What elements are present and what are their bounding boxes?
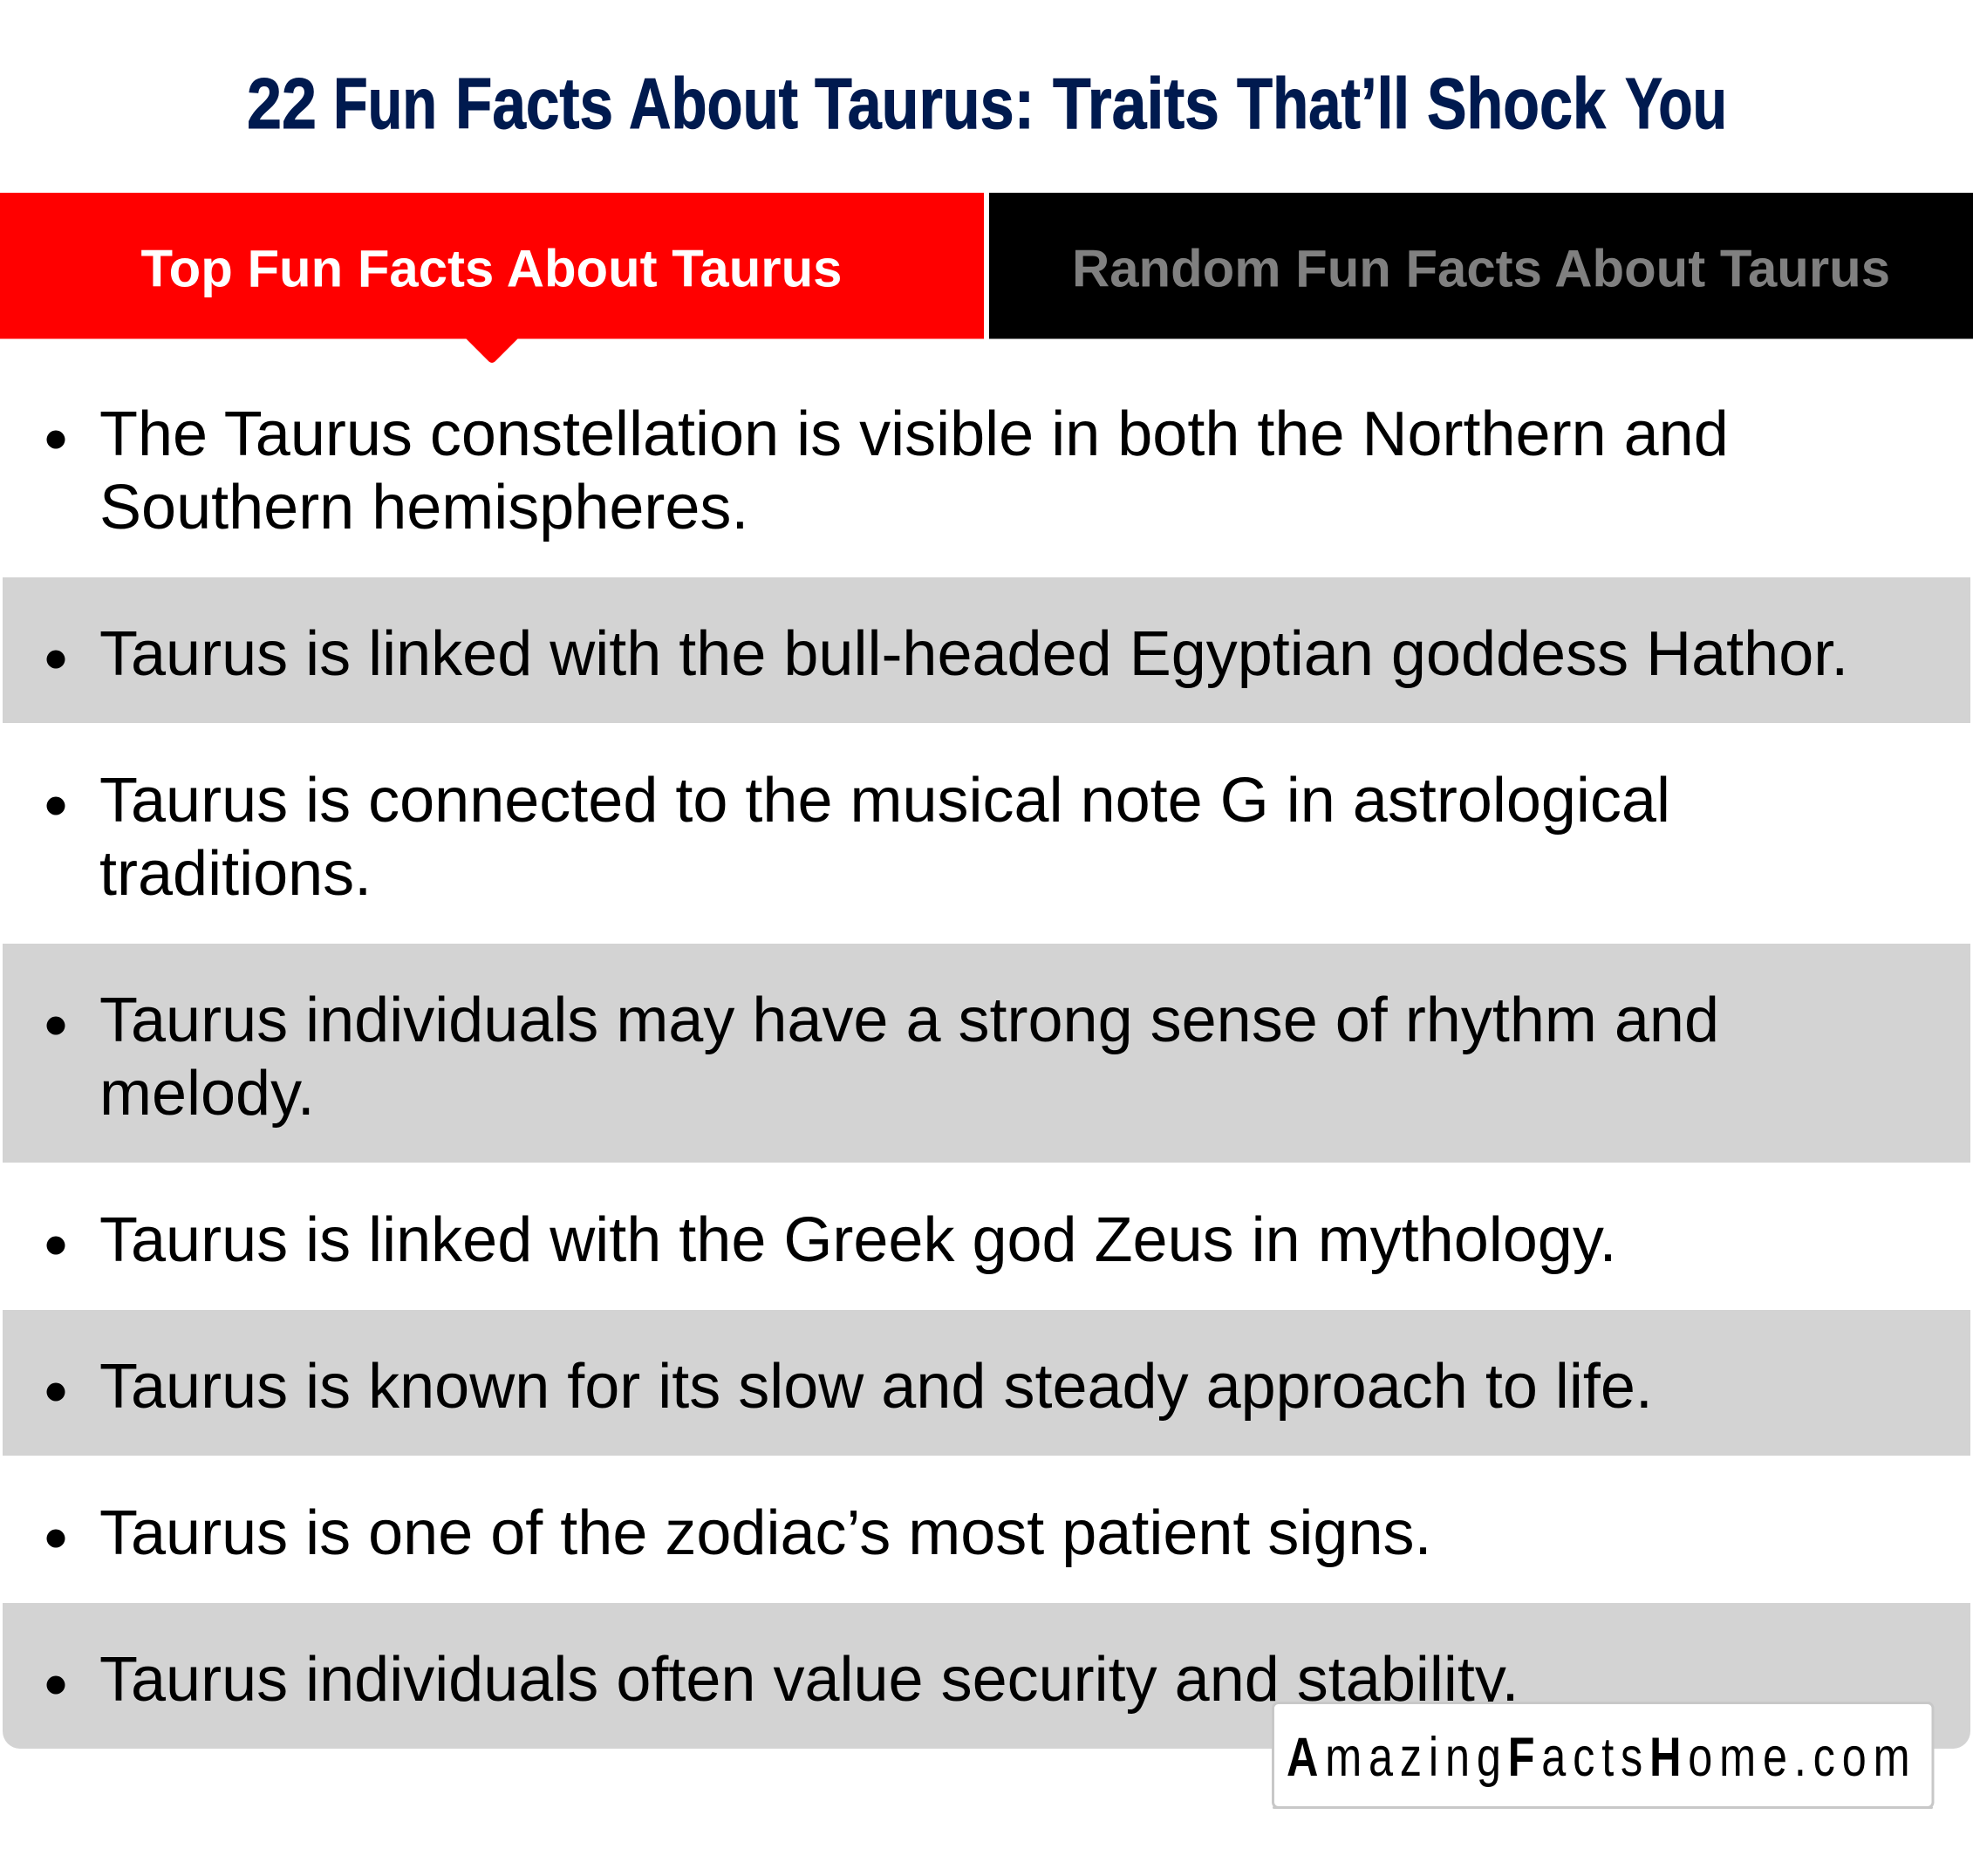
fact 3: Taurus is connected to the musical note G in astrological	[99, 766, 1670, 836]
title: You	[1625, 63, 1727, 144]
title: Traits	[1053, 63, 1219, 144]
title: Facts	[455, 63, 613, 144]
fact 1: Southern hemispheres.	[99, 473, 748, 542]
fact 7: Taurus is one of the zodiac’s most patient signs.	[99, 1498, 1432, 1568]
fact 8	[3, 1603, 1970, 1749]
tab: random fun facts	[989, 193, 1973, 338]
fact 6	[3, 1310, 1970, 1456]
fact 4: melody.	[99, 1059, 315, 1129]
tab: top fun facts: Top Fun Facts About Taurus	[141, 239, 843, 298]
fact 5: Taurus is linked with the Greek god Zeus in mythology.	[99, 1205, 1617, 1275]
fact 3	[47, 766, 1670, 909]
tab: top fun facts	[0, 193, 984, 363]
fact 6: Taurus is known for its slow and steady approach to life.	[99, 1352, 1653, 1422]
fact 4	[3, 944, 1970, 1163]
title: Fun	[333, 63, 437, 144]
fact 8: Taurus individuals often value security and stability.	[99, 1645, 1519, 1715]
tab: random fun facts: Random Fun Facts About Taurus	[1072, 239, 1890, 298]
title: That’ll	[1237, 63, 1410, 144]
watermark: AmazingFactsHome.com: AmazingFactsHome.com	[1287, 1727, 1916, 1788]
title: Taurus:	[815, 63, 1034, 144]
fact 4: Taurus individuals may have a strong sense of rhythm and	[99, 986, 1719, 1055]
title: About	[629, 63, 798, 144]
fact 3: traditions.	[99, 839, 372, 909]
title: Shock	[1427, 63, 1607, 144]
fact 1: The Taurus constellation is visible in both the Northern and	[99, 399, 1729, 469]
fact 1	[47, 399, 1729, 542]
title: 22	[247, 63, 317, 144]
fact 2	[3, 577, 1970, 723]
fact 2: Taurus is linked with the bull-headed Egyptian goddess Hathor.	[99, 619, 1848, 689]
watermark: AmazingFactsHome.com	[1273, 1702, 1933, 1809]
title	[247, 63, 1727, 144]
